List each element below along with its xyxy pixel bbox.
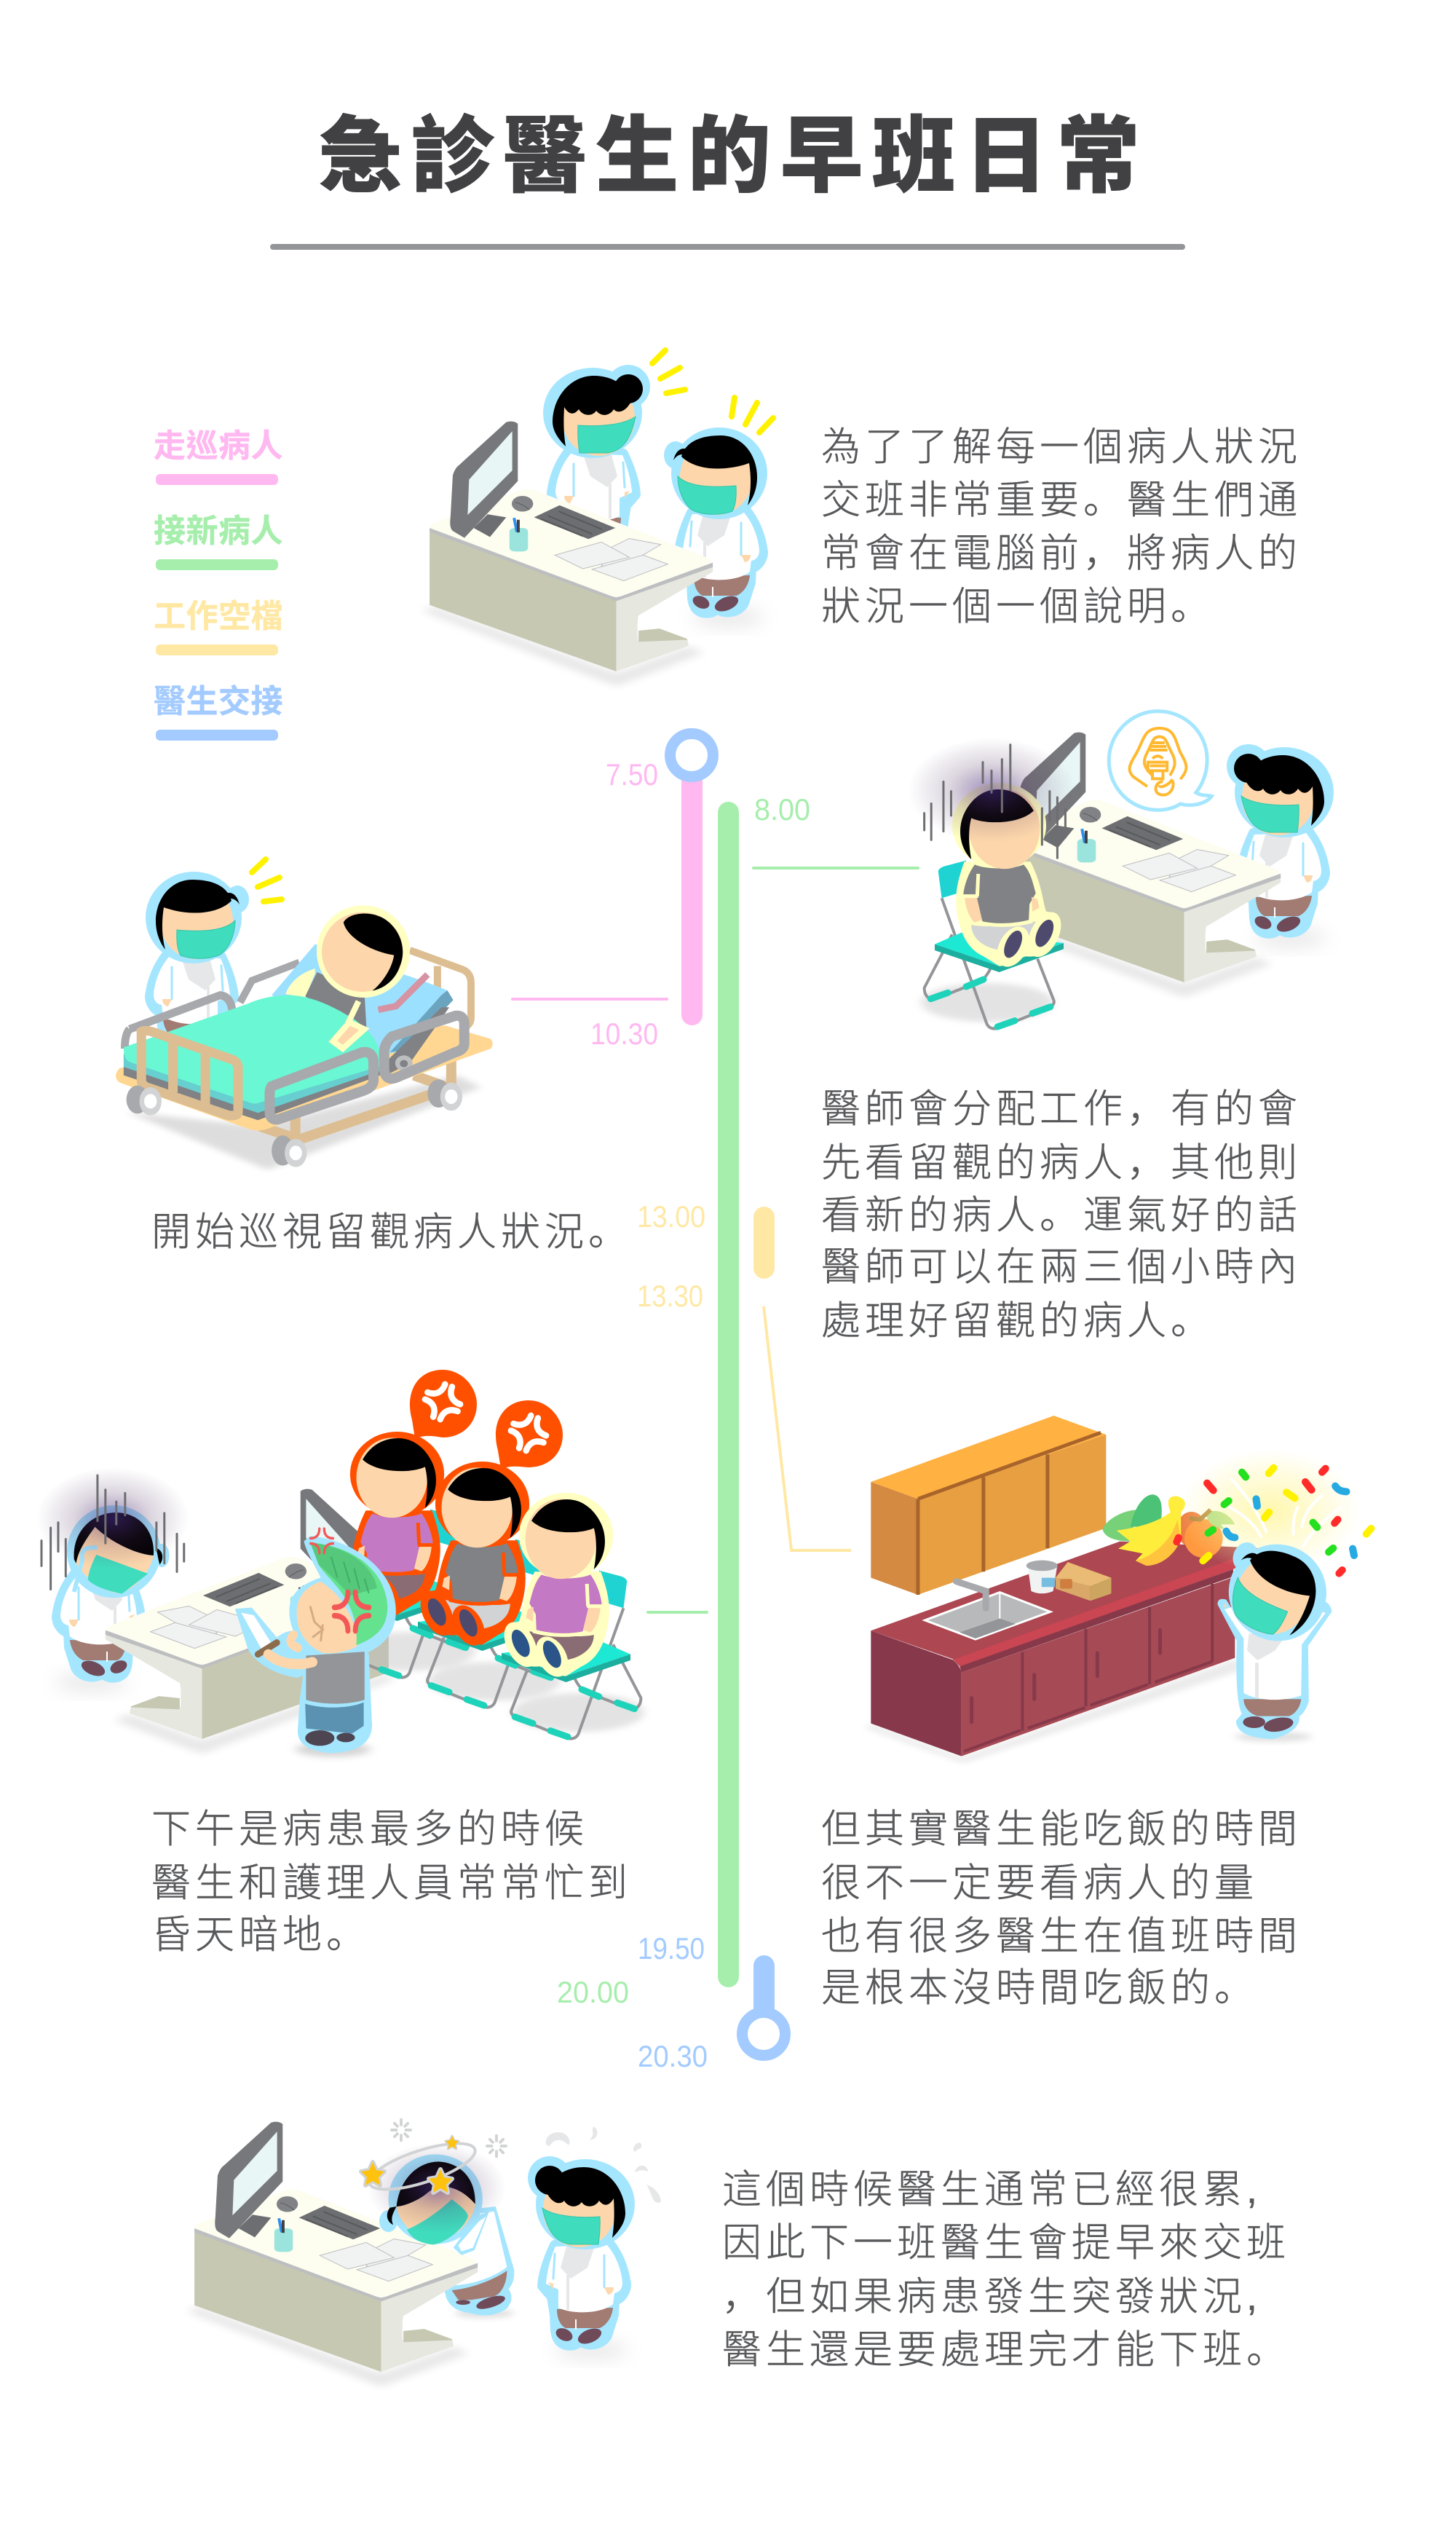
legend item: shift handover: [154, 684, 283, 741]
text: handover: [821, 425, 1302, 628]
connector green to waiting room: [646, 1611, 708, 1614]
sink: [925, 1582, 1051, 1639]
angry patient 1: [329, 1432, 444, 1618]
time 8.00: 8.00: [754, 792, 810, 827]
time 20.30: 20.30: [638, 2039, 708, 2073]
gloom lines: [41, 1475, 184, 1589]
chair 3: [502, 1571, 644, 1739]
text: busy afternoon: 醫生和護理人員常常忙到: [151, 1861, 632, 1905]
stressed doctor head: [67, 1505, 170, 1598]
handover bar: [753, 1955, 775, 2021]
text: meal time: 很不一定要看病人的量: [821, 1861, 1258, 1905]
text: handover: 為了了解每一個病人狀況: [821, 425, 1302, 469]
assigning doctor: [1227, 744, 1334, 948]
scene: handover at the computer: [425, 350, 773, 687]
connector pink to bed scene: [511, 998, 668, 1001]
time 20.00: 20.00: [557, 1975, 629, 2009]
sparks: [392, 2120, 506, 2156]
legend item: shift handover: 醫生交接: [154, 684, 283, 719]
legend: [154, 428, 283, 741]
text: evening handover: ，但如果病患發生突發狀況,: [722, 2275, 1262, 2319]
text: handover: 常會在電腦前，將病人的: [821, 532, 1302, 575]
time 7.50: 7.50: [606, 757, 658, 792]
doctor behind bed: [146, 872, 249, 1072]
angry patient 2: [414, 1462, 529, 1648]
speech bubble with lightbulb icon: [1109, 711, 1211, 810]
start ring: [670, 734, 713, 776]
fruit: [1103, 1494, 1235, 1566]
text: evening handover: 醫生還是要處理完才能下班。: [722, 2328, 1290, 2372]
legend item: free time: 工作空檔: [154, 599, 283, 634]
legend item: ward rounds: [154, 428, 283, 485]
text: evening handover: 因此下一班醫生會提早來交班: [722, 2221, 1290, 2265]
legend item: new patients: 接新病人: [154, 513, 283, 549]
text: work assignment: 看新的病人。運氣好的話: [821, 1194, 1302, 1237]
gloom aura: [908, 738, 1075, 843]
ward rounds bar: [681, 755, 703, 1025]
angry man with mohawk: [235, 1536, 396, 1757]
legend item: ward rounds: 走巡病人: [154, 428, 283, 464]
kitchen: [866, 1416, 1268, 1764]
gloom aura: [36, 1467, 189, 1569]
text: meal time: 也有很多醫生在值班時間: [821, 1914, 1302, 1958]
anger bubble 2: [496, 1400, 563, 1469]
desk and computer: [190, 2122, 478, 2387]
text: busy afternoon: 下午是病患最多的時候: [151, 1807, 588, 1851]
title rule: [270, 244, 1185, 250]
text: busy afternoon: 昏天暗地。: [151, 1913, 370, 1957]
text: busy afternoon: [151, 1807, 632, 1957]
scene: waiting room rush: [36, 1370, 644, 1757]
connector yellow to kitchen: [764, 1306, 851, 1550]
exhausted doctor head and dizzy stars: [379, 2154, 489, 2255]
text: meal time: 是根本沒時間吃飯的。: [821, 1966, 1258, 2010]
text: handover: 狀況一個一個說明。: [821, 585, 1214, 628]
tired patient: [952, 783, 1067, 969]
connector green to scene 2: [752, 867, 919, 869]
exhausted doctor body: [444, 2206, 514, 2318]
alert marks: [252, 859, 282, 902]
counter shadow: [866, 1658, 1242, 1764]
upper cabinet: [871, 1416, 1106, 1595]
legend item: new patients: [154, 513, 283, 570]
title: 急診醫生的早班日常: [319, 111, 1149, 203]
scene: evening handover: [190, 2120, 661, 2387]
drink cup: [1026, 1561, 1058, 1593]
text: work assignment: 處理好留觀的病人。: [821, 1299, 1214, 1343]
cardboard box: [1056, 1562, 1111, 1601]
doctor stretching: [1217, 1598, 1332, 1742]
text: ward round: 開始巡視留觀病人狀況。: [151, 1210, 632, 1254]
text: evening handover: 這個時候醫生通常已經很累,: [722, 2168, 1262, 2212]
incoming doctor: [528, 2156, 635, 2360]
streamers: [1230, 1480, 1341, 1546]
stressed doctor body: [55, 1574, 141, 1692]
anger bubble 1: [410, 1370, 477, 1438]
text: work assignment: 先看留觀的病人，其他則: [821, 1141, 1302, 1185]
dizzy orbit: [365, 2134, 480, 2198]
gloom lines: [925, 745, 1065, 858]
time 13.00: 13.00: [637, 1199, 705, 1234]
text: meal time: [821, 1807, 1302, 2010]
celebration glow: [1179, 1449, 1361, 1573]
scene: work assignment: [908, 711, 1334, 1029]
text: meal time: 但其實醫生能吃飯的時間: [821, 1807, 1302, 1851]
legend item: free time: [154, 599, 283, 655]
chair 1: [333, 1510, 475, 1678]
waiting patient 3: [498, 1493, 613, 1679]
end ring: [743, 2013, 785, 2055]
scene: ward round at bed: [116, 859, 493, 1170]
text: work assignment: 醫師可以在兩三個小時內: [821, 1245, 1302, 1289]
text: evening handover: [722, 2168, 1290, 2372]
stars: [361, 2136, 459, 2193]
text: handover: 交班非常重要。醫生們通: [821, 478, 1302, 522]
confetti: [1176, 1468, 1371, 1574]
gloom aura: [368, 2143, 506, 2233]
second doctor: [664, 427, 767, 628]
doctor behind desk: [543, 365, 650, 569]
hospital bed and patient: [116, 905, 493, 1170]
time 13.30: 13.30: [637, 1279, 703, 1313]
text: work assignment: 醫師會分配工作，有的會: [821, 1087, 1302, 1131]
time 10.30: 10.30: [590, 1017, 658, 1051]
timeline: [511, 734, 919, 2073]
alert marks: [652, 350, 773, 433]
text: work assignment: [821, 1087, 1302, 1343]
anger marks on man: [311, 1529, 369, 1631]
sweat drops: [546, 2126, 661, 2203]
chair: [921, 861, 1064, 1029]
desk and computer: [993, 733, 1281, 998]
desk and computer: [425, 422, 713, 687]
new patients bar: [718, 802, 739, 1987]
free time pill: [753, 1207, 775, 1279]
lower cabinet: [871, 1542, 1268, 1756]
chair 2: [418, 1539, 561, 1708]
time 19.50: 19.50: [638, 1931, 705, 1965]
scene: kitchen break: [866, 1416, 1371, 1764]
desk mirrored: [106, 1489, 393, 1754]
